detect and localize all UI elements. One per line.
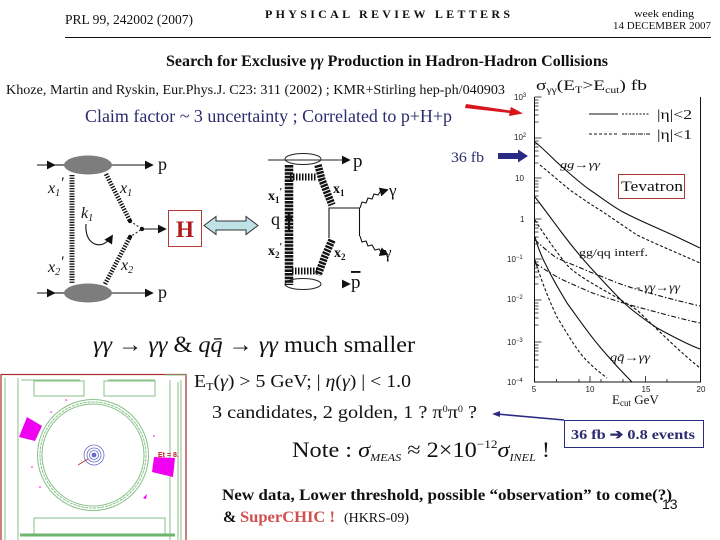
x axis labels: cut (620, 398, 631, 408)
candidates line: 3 candidates, 2 golden, 1 ? π (212, 402, 417, 422)
y axis labels: 2 (523, 133, 527, 139)
diagram labels: p (353, 151, 362, 172)
x axis labels: 20 (697, 385, 706, 394)
diagram labels: 1 (55, 188, 60, 199)
diagram labels: x (121, 257, 128, 274)
SuperCHIC line: & (223, 509, 236, 526)
diagram: exclusive Higgs production (37, 154, 167, 302)
thick gluons (289, 165, 332, 285)
diagram labels: ′ (60, 254, 64, 271)
event selection cuts: T (206, 381, 214, 393)
y axis labels: −1 (516, 255, 523, 261)
issue date: 14 DECEMBER 2007 (613, 21, 711, 32)
frame (1, 374, 186, 540)
citation: PRL 99, 242002 (2007) (65, 12, 193, 27)
Tevatron box (618, 174, 684, 198)
diagram labels: 2 (275, 250, 280, 260)
y axis labels: 1 (520, 215, 525, 224)
event selection cuts: ( (213, 371, 220, 392)
page number: 13 (662, 496, 678, 512)
diagram labels: x (333, 182, 340, 197)
diagram labels: 1 (88, 213, 93, 224)
arrowhead (492, 411, 500, 417)
candidates line: 0 (458, 404, 464, 414)
arrow: blue to plot (498, 150, 528, 162)
candidates line: 0 (443, 404, 448, 414)
diagram labels: q (271, 209, 280, 229)
diagram labels: k (81, 205, 88, 222)
diagram labels: p (351, 272, 360, 293)
diagram labels: γ (383, 243, 392, 262)
y axis labels: 10 (507, 378, 516, 387)
x axis labels: E (612, 392, 620, 407)
claim line: Claim factor ~ 3 uncertainty ; Correlated to p+H+p (85, 106, 452, 126)
axis title: >E (582, 78, 605, 94)
y axis labels: 10 (514, 93, 523, 102)
equation: backgrounds much smaller: γγ → γγ & qq̄ → γγ much smaller (93, 332, 415, 357)
diagram labels: x (48, 259, 55, 276)
diagram labels: 2 (55, 267, 60, 278)
box: expected events: 36 fb ➔ 0.8 events (571, 428, 696, 443)
chart: cross-section versus Ecut (507, 78, 706, 408)
x axis labels: 5 (532, 385, 537, 394)
equation: note on cross section: Note : σ (292, 437, 369, 462)
axis title: σ (536, 78, 544, 94)
diagram labels: p (158, 282, 167, 302)
y axis labels: −4 (516, 378, 523, 384)
equation: note on cross section: MEAS (369, 452, 402, 464)
diagram labels: x (268, 189, 275, 204)
citation HKRS: (HKRS-09) (344, 511, 409, 526)
candidates line: π (448, 402, 458, 422)
detector outline (5, 375, 186, 540)
journal header (65, 7, 711, 38)
event selection cuts: E (194, 371, 205, 391)
axis title: T (575, 85, 583, 95)
proton blobs (64, 156, 112, 302)
proton ellipses (268, 154, 349, 290)
axis title: γγ (545, 85, 557, 95)
panel: detector event display (1, 374, 186, 540)
inner tracker (84, 445, 104, 465)
SuperCHIC line: SuperCHIC ! (240, 509, 335, 526)
diagram labels: γ (388, 181, 397, 200)
arrow: events to candidates (497, 414, 564, 420)
box: Higgs (168, 210, 202, 246)
diagram labels: 2 (341, 252, 346, 262)
proton lines (37, 165, 165, 293)
y axis labels: 10 (507, 338, 516, 347)
y axis labels: 3 (523, 93, 527, 99)
y ticks (534, 97, 667, 382)
equation: note on cross section: ! (536, 437, 550, 462)
y axis labels: 10 (507, 255, 516, 264)
diagram labels: x (48, 180, 55, 197)
diagram labels: ′ (60, 175, 64, 192)
issue date (613, 9, 711, 32)
label: 36 fb: 36 fb (451, 150, 484, 166)
box: expected events (564, 420, 704, 448)
y axis labels (507, 93, 527, 387)
curves (535, 142, 700, 382)
equation: note on cross section: −12 (477, 437, 498, 451)
x axis labels: GeV (631, 392, 659, 407)
diagram labels: ′ (280, 242, 282, 253)
reference line: Khoze, Martin and Ryskin, Eur.Phys.J. C23: 311 (2002) ; KMR+Stirling hep-ph/040903 (6, 83, 505, 98)
diagram labels: ′ (280, 187, 282, 198)
diagram labels: p (158, 154, 167, 174)
curve labels: - γγ→γγ (636, 280, 680, 294)
plot frame (534, 97, 700, 382)
curve labels: gg→γγ (560, 159, 601, 171)
arrow: double light blue (204, 216, 258, 234)
Tevatron box: Tevatron (621, 179, 684, 195)
y axis labels: 10 (515, 174, 524, 183)
legend: |η|<2 (657, 108, 692, 123)
energy label: Et = 8. (158, 452, 179, 459)
conclusion line: New data, Lower threshold, possible “observation” to come(?) (222, 487, 672, 504)
diagram: quark loop to two photons (268, 151, 397, 293)
paper title: Search for Exclusive γγ Production in Hadron-Hadron Collisions (166, 53, 608, 70)
diagram labels: 1 (275, 195, 280, 205)
legend: |η|<1 (657, 128, 692, 143)
diagram labels: 2 (128, 265, 133, 276)
equation: note on cross section: ≈ 2×10 (401, 437, 477, 462)
y axis labels: −3 (516, 338, 523, 344)
diagram labels (47, 154, 167, 302)
equation: note on cross section: INEL (508, 452, 536, 464)
legend (589, 108, 692, 143)
candidates line: ? (463, 402, 477, 422)
axis title: ) fb (619, 78, 647, 94)
vertex dots (128, 219, 144, 239)
axis title: (E (557, 78, 575, 94)
diagram labels (268, 151, 397, 293)
x axis labels: 15 (642, 385, 651, 394)
curve labels: gg/qq interf. (579, 247, 648, 259)
gluon ladders (72, 174, 142, 284)
equation: note on cross section: σ (498, 437, 511, 462)
curve labels: qq̄→γγ (610, 350, 650, 364)
curve labels (560, 159, 680, 364)
y axis labels: 10 (514, 133, 523, 142)
event selection cuts: γ) > 5 GeV; | η(γ) | < 1.0 (220, 371, 406, 391)
y axis labels: 10 (507, 295, 516, 304)
diagram labels: 1 (340, 188, 345, 198)
issue date: week ending (634, 9, 695, 20)
diagram labels: x (120, 180, 127, 197)
loop arrow (86, 224, 112, 245)
diagram labels: x (268, 244, 275, 259)
quark box and photons (289, 190, 387, 254)
box: Higgs: H (176, 217, 194, 242)
calorimeter hits (19, 399, 175, 499)
diagram labels: 1 (127, 188, 132, 199)
x axis labels (532, 385, 706, 408)
y axis labels: −2 (516, 295, 523, 301)
axis title: cut (605, 85, 620, 95)
journal name: PHYSICAL REVIEW LETTERS (265, 7, 510, 21)
x axis labels: 10 (586, 385, 595, 394)
track (78, 459, 88, 465)
arrow: red to plot (465, 104, 523, 116)
diagram labels: x (334, 246, 341, 261)
